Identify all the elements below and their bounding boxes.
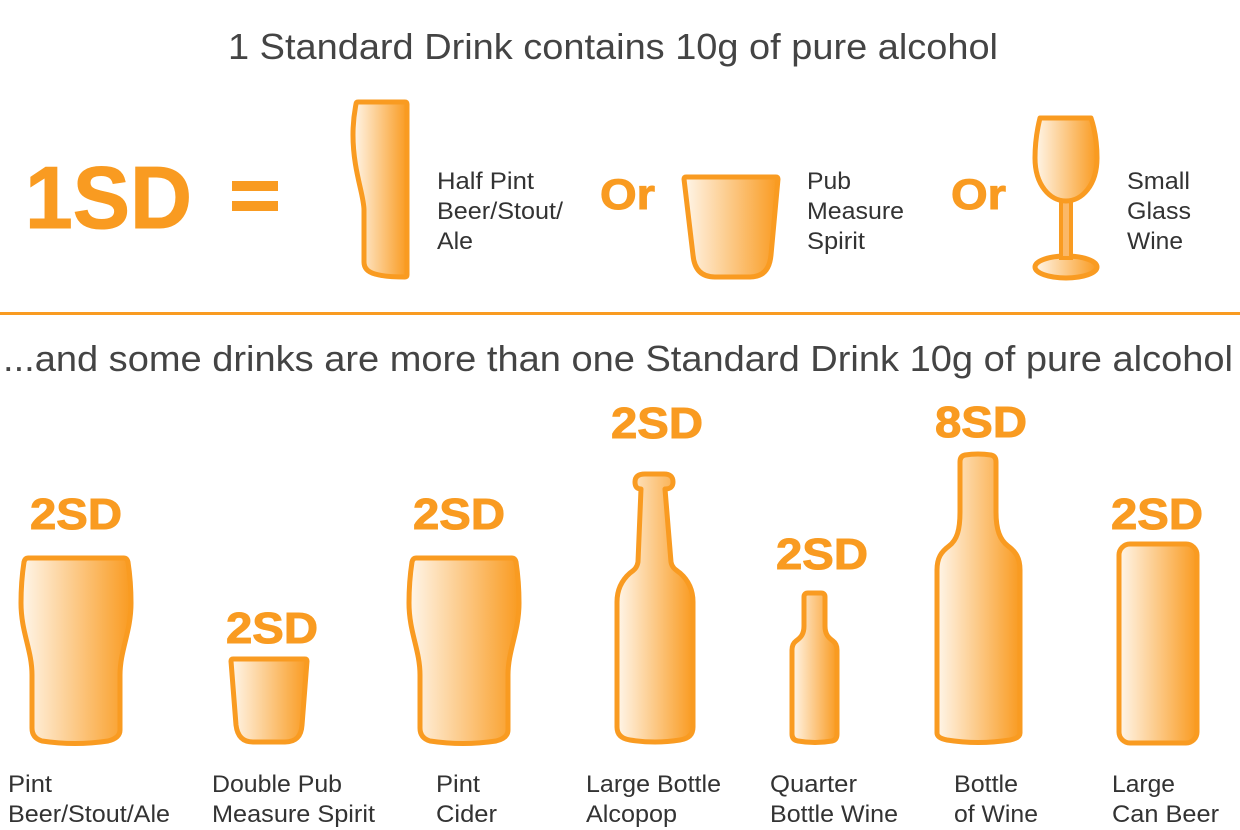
amount: 2SD: 2SD [413,490,505,539]
text: pub measure spirit [807,168,904,255]
panel: one standard drink equivalents [25,102,1191,278]
icon: small wine glass [1035,118,1097,278]
amount: 2SD: 2SD [30,490,122,539]
text: pint beer label [8,771,170,828]
item: large can beer [1111,490,1219,828]
text: can label [1112,771,1219,828]
icon: beer can [1119,544,1197,743]
amount: 2SD: 2SD [776,530,868,579]
text: quarter bottle label: Bottle Wine [770,801,898,828]
amount: 2SD: 2SD [226,604,318,653]
icon: cider pint glass [409,558,519,744]
icon: quarter wine bottle [792,593,837,742]
text: pub measure spirit: Pub [807,168,851,195]
text: half pint beer: Beer/Stout/ [437,198,563,225]
text: can label: Large [1112,771,1175,798]
item: quarter bottle wine [770,530,898,828]
amount: 8SD: 8SD [935,398,1027,447]
text: half pint beer [437,168,563,255]
icon: half pint glass [353,102,407,277]
text: half pint beer: Ale [437,228,473,255]
text: pint cider label: Cider [436,801,497,828]
text: double measure label [212,771,375,828]
item: pint beer [8,490,170,828]
text: pint cider label [436,771,497,828]
item: double pub measure spirit [212,604,375,828]
text: quarter bottle label [770,771,898,828]
text: alcopop label: Alcopop [586,801,677,828]
icon: wine bottle [937,454,1020,742]
text: bottle of wine label: Bottle [954,771,1018,798]
item: large bottle alcopop [586,399,721,828]
text: small glass wine [1127,168,1191,255]
text: quarter bottle label: Quarter [770,771,857,798]
amount: 2SD: 2SD [1111,490,1203,539]
text: half pint beer: Half Pint [437,168,534,195]
heading: drinks above one standard drink: ...and some drinks are more than one Standard Drink 10g of pure alcohol [3,338,1233,379]
icon: double measure glass [231,659,307,742]
label: 1SD: 1SD [25,148,192,247]
icon: pint glass [21,558,131,744]
item: bottle of wine [935,398,1038,828]
text: pint beer label: Pint [8,771,52,798]
item: pint cider [409,490,519,828]
text: pint cider label: Pint [436,771,480,798]
text: bottle of wine label: of Wine [954,801,1038,828]
text: small glass wine: Small [1127,168,1190,195]
text: double measure label: Double Pub [212,771,342,798]
text: pub measure spirit: Measure [807,198,904,225]
word: Or: Or [600,171,655,219]
text: double measure label: Measure Spirit [212,801,375,828]
text: pub measure spirit: Spirit [807,228,865,255]
word: Or: Or [951,171,1006,219]
title: standard drink definition: 1 Standard Drink contains 10g of pure alcohol [228,26,998,67]
text: can label: Can Beer [1112,801,1219,828]
icon: pub measure glass [684,177,778,277]
text: small glass wine: Glass [1127,198,1191,225]
amount: 2SD: 2SD [611,399,703,448]
icon: alcopop bottle [617,474,693,742]
text: alcopop label [586,771,721,828]
text: alcopop label: Large Bottle [586,771,721,798]
text: small glass wine: Wine [1127,228,1183,255]
text: pint beer label: Beer/Stout/Ale [8,801,170,828]
equals sign [232,181,278,211]
text: bottle of wine label [954,771,1038,828]
